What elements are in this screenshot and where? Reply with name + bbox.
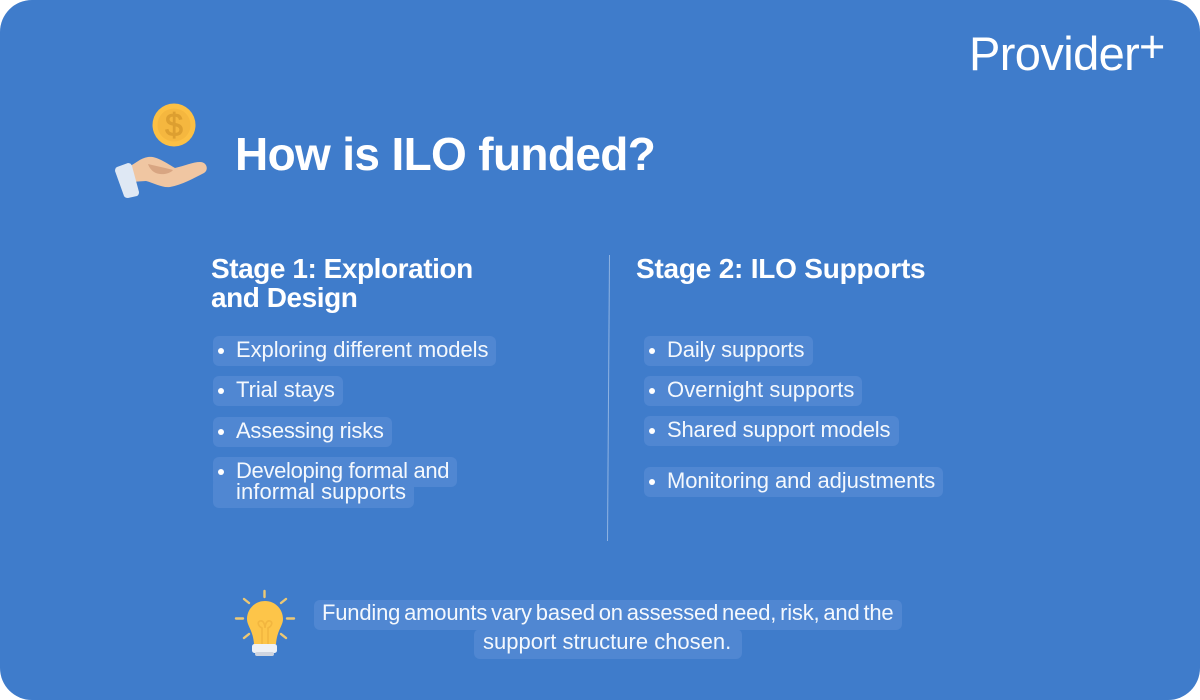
list item: developing formal and informal supports [213, 457, 457, 508]
list item: developing formal and informal supports: Developing formal and [236, 458, 449, 483]
heading: stage 1 [211, 253, 473, 313]
list item: exploring different models: Exploring different models [236, 337, 488, 362]
list item: assessing risks: Assessing risks [236, 418, 384, 443]
list item: developing formal and informal supports: informal supports [236, 479, 406, 504]
icon: hand with coin: $ [165, 107, 183, 143]
heading: stage 1: Stage 1: Exploration [211, 253, 473, 284]
logo: Provider+: Provider [969, 27, 1139, 80]
panel: stage 2 [636, 253, 943, 497]
callout: funding note: support structure chosen. [483, 629, 731, 654]
list item: monitoring and adjustments: Monitoring and adjustments [667, 468, 935, 493]
icon: hand with coin [115, 104, 207, 198]
list item: overnight supports: Overnight supports [667, 377, 854, 402]
title: How is ILO funded? [235, 128, 655, 180]
list item: trial stays: Trial stays [236, 377, 335, 402]
panel: stage 1 [211, 253, 496, 508]
heading: stage 2: Stage 2: ILO Supports [636, 253, 925, 284]
list item: assessing risks [213, 417, 392, 447]
icon: light bulb [234, 590, 296, 656]
callout: funding note [314, 600, 902, 659]
callout: funding note: Funding amounts vary based on assessed need, risk, and the [322, 600, 893, 625]
list item: daily supports: Daily supports [667, 337, 804, 362]
heading: stage 1: and Design [211, 282, 357, 313]
list item: shared support models: Shared support models [667, 417, 890, 442]
logo: Provider+: + [1139, 21, 1165, 72]
list item: trial stays [213, 376, 343, 406]
list item: daily supports [644, 336, 813, 366]
divider [607, 255, 610, 541]
